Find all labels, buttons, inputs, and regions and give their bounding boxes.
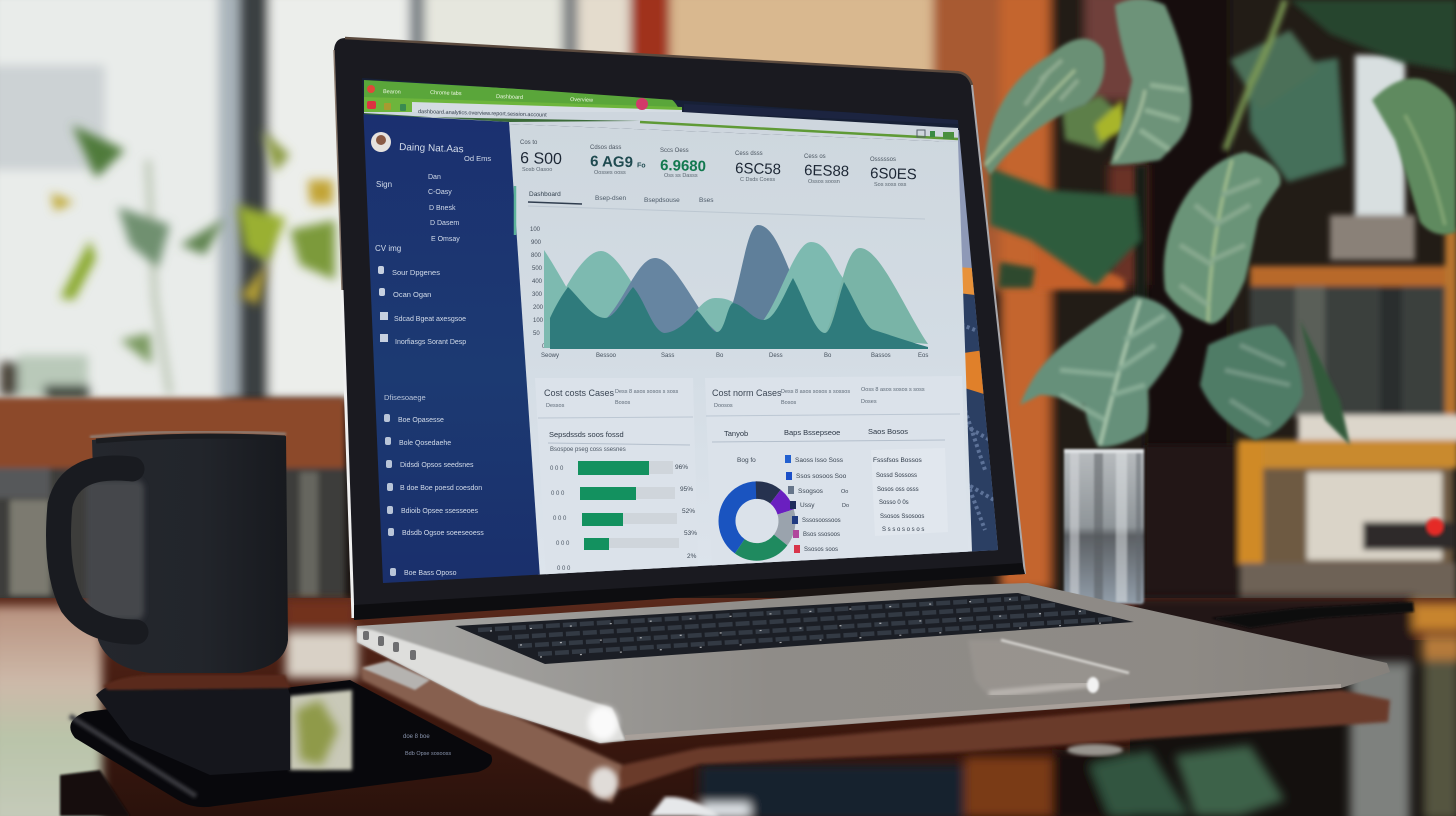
browser chrome	[364, 80, 958, 142]
KPI row: C Dsds Coess	[740, 177, 775, 183]
keyboard	[455, 593, 1134, 664]
panel: donut and legend card: Cost norm Cases	[712, 388, 782, 398]
sidebar: CV img	[375, 244, 401, 253]
main content area	[509, 124, 972, 576]
panel: bar chart card: 2%	[687, 553, 697, 560]
KPI row: 6S0ES	[870, 165, 917, 183]
series: large slate peak	[732, 225, 790, 320]
sidebar: Dan	[428, 174, 441, 181]
legend: Ssos sosoos Soo	[796, 473, 847, 480]
legend table: Fsssfsos Bossos	[873, 457, 923, 464]
panel: bar chart card: Cost costs Cases	[544, 388, 615, 398]
series: dark teal foreground	[550, 278, 928, 349]
large plant leaves	[984, 0, 1456, 447]
sidebar: Sdcad Bgeat axesgsoe	[394, 316, 466, 323]
KPI row: Sccs Oess	[660, 148, 689, 154]
legend: Ssogsos	[798, 488, 824, 495]
browser chrome: Bearon	[383, 89, 401, 96]
panel: donut and legend card: Tanyob	[724, 429, 748, 438]
series: teal pair	[764, 242, 843, 333]
tabs: Bsep-dsen	[595, 195, 626, 202]
laptop screen	[360, 76, 1010, 586]
KPI row: 6 S00	[520, 150, 562, 168]
tablet screen reflection	[290, 690, 352, 770]
KPI row: Oosses ooss	[594, 170, 626, 176]
KPI row: Cess os	[804, 154, 826, 160]
area chart: 200	[533, 305, 544, 311]
KPI row: 6.9680	[660, 157, 706, 175]
legend: Oo	[841, 489, 848, 495]
sidebar: Inorfiasgs Sorant Desp	[395, 339, 466, 346]
tabs: Bses	[699, 197, 714, 204]
legend: Do	[842, 503, 849, 509]
panel: bar chart card: 0 0 0	[553, 516, 567, 522]
sidebar: Dfisesoaege	[384, 393, 426, 402]
area chart: Sass	[661, 353, 674, 359]
tablet lying on the table: Bdb Opse sosooss	[405, 751, 451, 757]
area chart: 0	[542, 344, 546, 350]
leaf: lower left	[1020, 296, 1182, 447]
coffee mug	[58, 432, 288, 673]
background: wooden ledge behind the mug	[0, 398, 345, 600]
area chart: Bo	[716, 353, 724, 359]
KPI row: Sosb Oasoo	[522, 167, 552, 173]
series: small hump	[695, 298, 733, 332]
sidebar: Daing Nat.Aas	[399, 142, 464, 155]
area chart: Bo	[824, 353, 832, 359]
KPI row: 6ES88	[804, 162, 849, 180]
KPI row: Cdsos dass	[590, 145, 621, 151]
KPI row: Cos to	[520, 140, 538, 146]
sidebar: Boe Opasesse	[398, 417, 444, 424]
panel: donut and legend card	[705, 376, 968, 566]
panel: bar chart card: Dessos	[546, 403, 565, 409]
legend: Sssosoossoos	[802, 518, 841, 524]
cable	[1211, 602, 1414, 628]
mug reflection	[96, 678, 290, 775]
area chart: 300	[532, 292, 543, 298]
ports	[363, 631, 416, 660]
series: slate blue	[608, 258, 716, 333]
KPI row: Osssssos	[870, 157, 896, 163]
tabs: Bsepdsouse	[644, 197, 680, 204]
panel: donut and legend card: Saos Bosos	[868, 427, 908, 436]
area chart: 100	[533, 318, 544, 324]
sidebar: D Dasem	[430, 220, 459, 227]
sidebar: Ocan Ogan	[393, 290, 431, 299]
panel: bar chart card: 96%	[675, 464, 688, 471]
area chart: 400	[532, 279, 543, 285]
panel: bar chart card: 0 0 0	[551, 491, 565, 497]
sidebar: B doe Boe poesd coesdon	[400, 485, 482, 492]
leaf: lower right	[1200, 320, 1350, 445]
panel: donut and legend card: Bosos	[781, 400, 797, 406]
sidebar: Bdioib Opsee ssesseoes	[401, 508, 479, 515]
panel: bar chart card: Sepsdssds soos fossd	[549, 430, 624, 439]
legend table: Sosso 0 0s	[879, 500, 909, 506]
legend table	[874, 458, 924, 531]
panel: bar chart card: Dess 8 asos sosos s soss	[615, 389, 679, 395]
area chart: Bassos	[871, 353, 891, 359]
KPI row: 6 AG9 Fo	[590, 153, 646, 171]
background: shelves and window light on the right	[1035, 55, 1456, 610]
leaf: upper left	[984, 39, 1105, 175]
legend: Ussy	[800, 502, 815, 509]
sidebar: Didsdi Opsos seedsnes	[400, 462, 474, 469]
panel: bar chart card: Bsospoe pseg coss ssesnes	[550, 447, 626, 453]
area chart: 50	[533, 331, 540, 337]
legend: Saoss Isso Soss	[795, 457, 844, 464]
leaf: far right	[1372, 78, 1456, 234]
wallpaper strip	[938, 130, 1000, 553]
reflected text on tablet: doe 8 boe	[403, 734, 430, 740]
panel: donut and legend card: Dess 8 asos sosos s sossos	[781, 389, 850, 395]
panel: donut and legend card: Baps Bssepseoe	[784, 428, 840, 437]
area chart: 800	[531, 253, 542, 259]
legend table: S s s o s o s o s	[882, 527, 924, 533]
laptop lid	[334, 38, 1025, 620]
avatar	[371, 132, 391, 152]
area chart: 500	[532, 266, 543, 272]
legend	[785, 455, 849, 553]
laptop reflection on the table	[360, 661, 1390, 816]
panel: bar chart card: Bosos	[615, 400, 631, 406]
KPI row: Sos soss oss	[874, 182, 907, 188]
trackpad	[968, 640, 1129, 697]
sidebar: Od Ems	[464, 154, 491, 163]
area chart: 100	[530, 227, 541, 233]
sidebar: Boe Bass Oposo	[404, 570, 457, 577]
panel: bar chart card: 53%	[684, 530, 697, 537]
leaf: upper centre	[1110, 0, 1191, 165]
panel: bar chart card: 95%	[680, 486, 693, 493]
panel: bar chart card	[535, 378, 698, 576]
area chart: Dess	[769, 353, 783, 359]
series: light teal	[544, 250, 568, 348]
area chart: Seowy	[541, 353, 559, 359]
KPI row	[520, 140, 917, 188]
area chart	[530, 225, 928, 359]
area chart: Eos	[918, 353, 928, 359]
KPI row: Cess dsss	[735, 151, 763, 157]
browser chrome: Overview	[570, 97, 593, 104]
KPI row: 6SC58	[735, 160, 781, 178]
leaf: centre large	[1164, 152, 1281, 324]
white front rim	[357, 628, 625, 743]
sidebar: D Bnesk	[429, 205, 456, 212]
sidebar: Sign	[376, 180, 392, 189]
KPI row: Oss ss Dasss	[664, 173, 698, 179]
table surface	[0, 598, 1456, 816]
tablet lying on the table	[60, 675, 492, 816]
glass tumbler	[1064, 449, 1144, 604]
laptop base	[357, 583, 1414, 743]
sidebar: C-Oasy	[428, 189, 452, 196]
legend: Ssosos soos	[804, 547, 838, 553]
donut chart	[718, 481, 796, 561]
legend table: Sosos oss osss	[877, 487, 919, 493]
panel: donut and legend card: Doosos	[714, 403, 733, 409]
sidebar: E Omsay	[431, 236, 460, 243]
sidebar: Bole Qosedaehe	[399, 440, 451, 447]
sidebar	[362, 114, 540, 585]
panel: bar chart card: 0 0 0	[556, 541, 570, 547]
legend table: Sossd Sossoss	[876, 473, 917, 479]
panel: bar chart card: 0 0 0	[557, 566, 571, 572]
panel: donut and legend card: Doses	[861, 399, 877, 405]
panel: donut and legend card: Ooss 8 asos sosos s soss	[861, 387, 925, 393]
KPI row: Ossos soosn	[808, 179, 840, 185]
panel: bar chart card: 0 0 0	[550, 466, 564, 472]
browser action icons	[917, 130, 954, 139]
sidebar: Bdsdb Ogsoe soeeseoess	[402, 530, 484, 537]
area chart: Bessoo	[596, 353, 617, 359]
panel: donut and legend card: Bog fo	[737, 457, 756, 464]
grey highlight inside handle	[86, 480, 144, 620]
background: blurred small plant on the left	[0, 125, 335, 399]
area chart: 900	[531, 240, 542, 246]
panel: bar chart card: 52%	[682, 508, 695, 515]
tabs: Dashboard	[529, 191, 561, 198]
browser chrome: Chrome tabs	[430, 90, 462, 97]
legend table: Ssosos Ssosoos	[880, 514, 924, 520]
legend: Bsos ssosoos	[803, 532, 840, 538]
icon: mug handle	[58, 468, 136, 632]
browser chrome: Dashboard	[496, 94, 523, 101]
tabs	[515, 186, 925, 235]
sidebar: Sour Dpgenes	[392, 268, 440, 277]
browser chrome: dashboard.analytics.overview.report.session.account	[418, 109, 547, 119]
